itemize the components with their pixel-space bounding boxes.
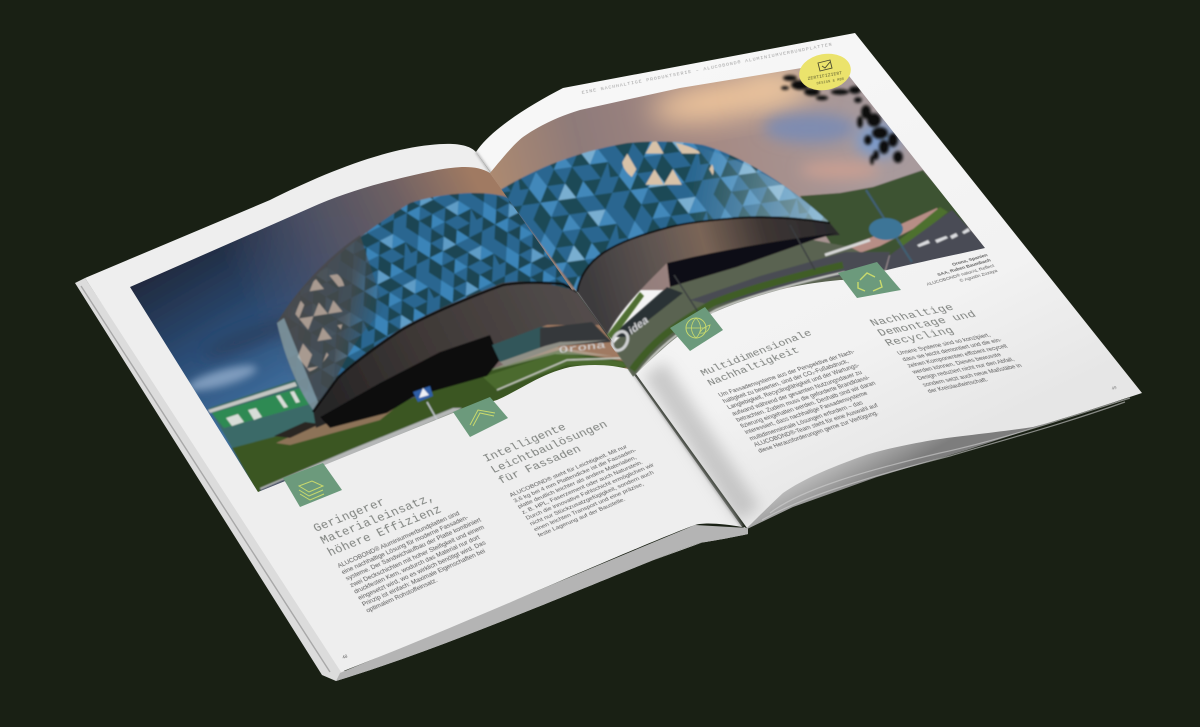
body text: Multidimensionale Nachhaltigkeit: interessiert, dass nachhaltige Fassadensysteme (744, 391, 870, 436)
pink cloud (800, 161, 880, 179)
right page (476, 33, 1142, 528)
Oidea lettering: idea (627, 313, 651, 338)
body text: Multidimensionale Nachhaltigkeit: Um Fassadensysteme aus der Perspektive der Nach- (718, 350, 856, 399)
facade band (304, 192, 570, 405)
photo on left page (130, 167, 629, 492)
certificate icon (818, 60, 832, 71)
road right (885, 210, 990, 274)
body text: Multidimensionale Nachhaltigkeit: fizierung eingehalten werden. Deshalb sind wir daran (740, 381, 877, 430)
caption for photo: ALUCOBOND® naturAL Reflect (925, 262, 996, 287)
body text: Nachhaltige Demontage und Recycling: sondern setzt auch neue Maßstäbe in (921, 362, 1024, 388)
green lawn strip (632, 265, 843, 370)
left page stack (75, 278, 748, 681)
body text: Multidimensionale Nachhaltigkeit: multidimensionale Lösungen erfordern – das (749, 400, 864, 442)
tan triangles on facade end (294, 273, 345, 372)
caption for photo: Orona, Spanien (951, 253, 989, 268)
building soffit (313, 281, 600, 428)
white road edge (825, 240, 870, 255)
left stack grey line (81, 286, 330, 672)
heading: Intelligente Leichtbaulösungen: für Fassaden (495, 443, 584, 487)
dark glass at the entrance (610, 287, 683, 337)
body text: Multidimensionale Nachhaltigkeit: ALUCOBOND®-Team steht für eine Auswahl auf (752, 402, 880, 448)
page number left: 48 (342, 653, 348, 660)
body text: Multidimensionale Nachhaltigkeit: betrachten. Zudem muss die geforderte Brandklassi- (735, 375, 872, 423)
black facade rim (313, 283, 578, 412)
pale wash on facade right (680, 143, 830, 223)
body text: Intelligente Leichtbaulösungen: feste Lagerung auf der Baustelle. (536, 496, 627, 538)
left page (85, 144, 742, 672)
body text: Intelligente Leichtbaulösungen: platte deutlich leichter als andere Materialien, (516, 454, 638, 510)
book: page stacks and pages (75, 33, 1142, 681)
body text: Geringerer Materialeinsatz: eingesetzt wird, wo es wirklich benötigt wird. Das (357, 540, 487, 602)
body text: Multidimensionale Nachhaltigkeit: aufwand während der gesamten Nutzungsdauer zu (731, 370, 864, 417)
body text: Multidimensionale Nachhaltigkeit: haltigkeit zu bewerten, sind der CO₂-Fußabdruck, (722, 359, 851, 405)
page number right: 49 (1111, 385, 1118, 391)
road markings (917, 228, 970, 247)
sky fading to brown near the gutter (239, 167, 629, 400)
light strip of wall (500, 340, 608, 366)
heading: Nachhaltige Demontage und Recycling: Demontage und (876, 310, 979, 339)
black glazing (320, 335, 500, 428)
icon square: recycling symbol (838, 262, 901, 298)
facade dark rim (577, 217, 830, 292)
dark grey facade end (277, 235, 385, 410)
yellow certificate badge (796, 50, 854, 94)
lawn highlights (483, 353, 627, 390)
icon square: chevron profile (453, 397, 508, 437)
heading: Intelligente Leichtbaulösungen: Leichtbaulösungen (488, 418, 610, 476)
body text: Geringerer Materialeinsatz: zwei Deckschichten mit hoher Steifigkeit und einem (349, 524, 486, 589)
magazine mockup scene (75, 33, 1142, 681)
left bottom stack shading (336, 525, 748, 681)
body text: Intelligente Leichtbaulösungen: 3,6 kg bei 4 mm Plattendicke ist die Fassaden- (512, 447, 638, 504)
right page stack (745, 392, 1141, 530)
grey road strip (690, 252, 890, 306)
icon square: globe with leaf (670, 307, 723, 351)
green glimpse by the glass (607, 292, 644, 340)
peach sunset glow (648, 70, 792, 130)
lavender blue cloud (764, 113, 856, 143)
hills (800, 170, 985, 258)
lamp posts (674, 225, 815, 312)
lawn (232, 350, 640, 495)
body text: Geringerer Materialeinsatz: druckfesten Kern, wodurch das Material nur dort (353, 534, 481, 595)
dark plinth (274, 422, 320, 438)
black glazing band (667, 233, 837, 287)
body text: Multidimensionale Nachhaltigkeit: Langlebigkeit, Recyclingfähigkeit und der Wartungs- (726, 363, 861, 411)
pale glow at facade end (277, 318, 318, 410)
heading: Intelligente Leichtbaulösungen: Intelligente (481, 421, 569, 465)
body text: Nachhaltige Demontage und Recycling: der Kreislaufwirtschaft. (926, 377, 990, 394)
body text: Intelligente Leichtbaulösungen: Durch die innovative Fahlschicht ermöglichen wir (524, 462, 656, 521)
left sky (130, 192, 412, 485)
caption for photo: SAA, Ruben Baumbach (936, 258, 992, 278)
white kerb line (636, 272, 845, 376)
dark cloud streak (208, 315, 280, 359)
right page gutter shadow (654, 369, 749, 514)
gutter line (476, 152, 742, 527)
right sky (490, 68, 974, 291)
body text: Geringerer Materialeinsatz: eine nachhaltige Lösung für moderne Fassaden- (340, 515, 470, 576)
body text: Multidimensionale Nachhaltigkeit: diese Herausforderungen gerne zur Verfügung. (757, 411, 880, 454)
badge text: DESIGN & MDR (817, 78, 845, 86)
body text: Nachhaltige Demontage und Recycling: Design reduziert nicht nur den Abfall, (916, 357, 1017, 382)
heading: Nachhaltige Demontage und Recycling: Nachhaltige (868, 303, 957, 329)
body text: Geringerer Materialeinsatz: optimalem Rohstoffeinsatz. (365, 577, 439, 614)
heading: Geringerer Materialeinsatz: höhere Effizienz (325, 503, 444, 559)
paved strip along bottom edge (260, 408, 462, 494)
body text: Geringerer Materialeinsatz: ALUCOBOND® Aluminiumverbundplatten sind (336, 509, 461, 570)
body text: Geringerer Materialeinsatz: systeme. Der Sandwichaufbau der Platte kombiniert (345, 517, 483, 582)
body text: Nachhaltige Demontage und Recycling: Unsere Systeme sind so konzipiert, (896, 332, 993, 357)
caption for photo: © Agustin Zozaya (958, 267, 999, 284)
body text: Intelligente Leichtbaulösungen: einen leichten Transport und eine präzise, (532, 481, 646, 533)
tan ground path (276, 408, 395, 445)
pedestrian sign (412, 384, 438, 420)
stripes on right stack (762, 398, 1130, 520)
body text: Geringerer Materialeinsatz: Prinzip ist einfach: Maximale Eigenschaften bei (361, 548, 487, 608)
distant teal building (209, 379, 316, 448)
running header: EINE NACHHALTIGE PRODUKTSERIE – ALUCOBOND® ALUMINIUMVERBUNDPLATTEN (581, 40, 833, 96)
pale cloud (185, 360, 259, 396)
tree foliage (781, 75, 903, 165)
round blue road sign (866, 190, 912, 262)
heading: Nachhaltige Demontage und Recycling: Recycling (883, 326, 957, 349)
right building soffit (577, 217, 840, 335)
body text: Nachhaltige Demontage und Recycling: zelnen Komponenten effizient recycelt (906, 343, 1010, 369)
body text: Nachhaltige Demontage und Recycling: dass sie leicht demontiert und die ein- (901, 337, 1004, 363)
badge text: ZERTIFIZIERT (807, 71, 843, 82)
teal entrance (492, 327, 548, 362)
heading: Multidimensionale Nachhaltigkeit: Nachhaltigkeit (706, 346, 802, 389)
ground below building (612, 240, 880, 377)
body text: Intelligente Leichtbaulösungen: z. B. HPL, Faserzement oder auch Naturstein. (520, 459, 645, 516)
pink and white roadside (851, 207, 938, 253)
Orona lettering: Orona (558, 340, 606, 356)
grey glass wall (540, 322, 612, 348)
body text: Intelligente Leichtbaulösungen: nicht nur Stückzusatzgefügigkeit, sondern auch (528, 469, 656, 527)
cream triangles on facade (619, 136, 717, 196)
Oidea lettering (609, 313, 651, 353)
heading: Geringerer Materialeinsatz: Geringerer (311, 495, 388, 535)
green and white stripes of the distant building (212, 388, 310, 428)
grass verge (900, 207, 948, 246)
body text: Intelligente Leichtbaulösungen: ALUCOBOND® steht für Leichtigkeit. Mit nur (508, 444, 629, 499)
photo on right page (490, 68, 985, 377)
heading: Multidimensionale Nachhaltigkeit: Multidimensionale (699, 328, 815, 379)
facade band right (500, 142, 830, 292)
dark strip on the paving (260, 478, 285, 491)
heading: Geringerer Materialeinsatz: Materialeinsatz, (318, 491, 437, 547)
roof line of the distant building (208, 382, 297, 413)
body text: Nachhaltige Demontage und Recycling: werden können. Dieses bewusste (910, 352, 1004, 376)
icon square: stacked layers (283, 463, 342, 507)
